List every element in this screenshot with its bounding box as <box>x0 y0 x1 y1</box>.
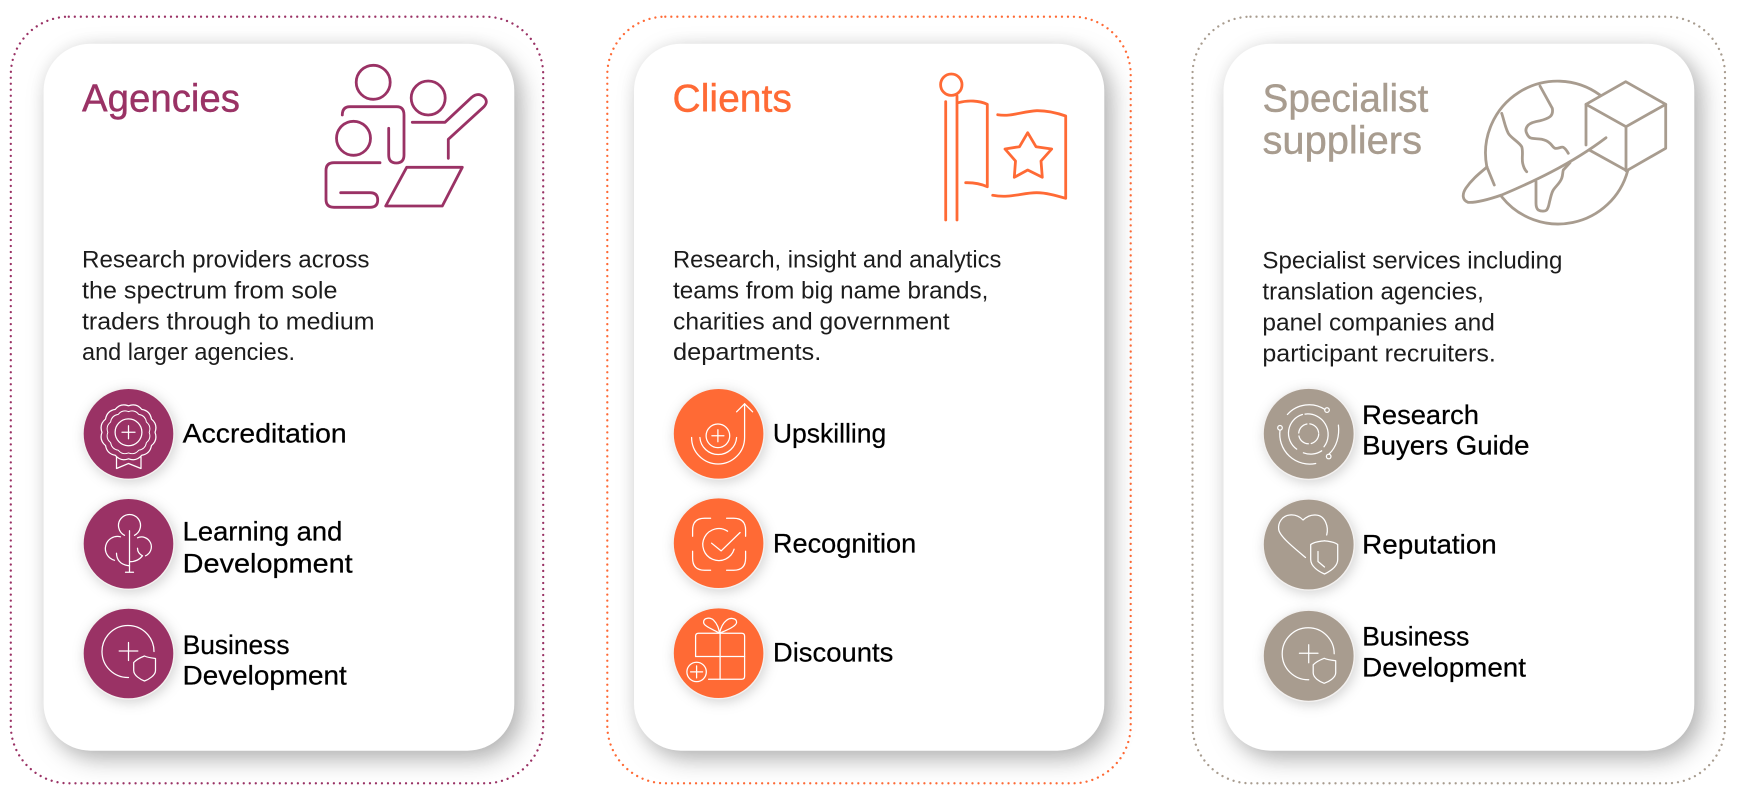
card: agencies <box>44 44 514 751</box>
icon: flag with star <box>941 74 1066 220</box>
icon: upskilling <box>673 388 764 479</box>
card: specialist suppliers <box>1224 44 1694 751</box>
heading: Clients: Clients <box>672 78 792 121</box>
label: Business Development: Development <box>1362 653 1527 683</box>
text: clients description: departments. <box>673 339 821 366</box>
text: specialist description: participant recruiters. <box>1262 341 1496 368</box>
text: specialist description: translation agencies, <box>1262 279 1484 306</box>
label: Discounts: Discounts <box>773 638 893 668</box>
label: Business Development: Development <box>183 661 347 691</box>
dotted outline: agencies <box>11 17 543 783</box>
label: Learning and Development: Development <box>183 549 353 579</box>
label: Reputation: Reputation <box>1362 530 1497 560</box>
text: clients description: charities and government <box>673 308 950 335</box>
text: specialist description: panel companies and <box>1262 309 1495 336</box>
text: clients description <box>673 247 1001 366</box>
panel: specialist suppliers <box>1192 17 1725 783</box>
panel: clients <box>607 17 1131 783</box>
text: clients description: Research, insight and analytics <box>673 247 1001 274</box>
icon: business development <box>1263 610 1354 701</box>
dotted outline: specialist suppliers <box>1192 17 1725 783</box>
label: Business Development <box>1362 622 1527 683</box>
card: clients <box>634 44 1104 751</box>
icon: learning tree <box>83 498 174 589</box>
icon: research buyers guide <box>1263 388 1354 479</box>
panel: agencies <box>11 17 543 783</box>
icon: accreditation badge <box>83 388 174 479</box>
label: Accreditation: Accreditation <box>183 419 347 449</box>
label: Business Development <box>183 630 347 691</box>
text: agencies description: and larger agencies. <box>82 339 295 366</box>
heading: Agencies: Agencies <box>82 78 240 121</box>
text: agencies description: the spectrum from sole <box>82 277 338 304</box>
label: Research Buyers Guide <box>1362 400 1530 461</box>
label: Recognition: Recognition <box>773 529 916 559</box>
icon: people with laptop <box>326 65 486 207</box>
text: agencies description: traders through to medium <box>82 308 374 335</box>
text: clients description: teams from big name brands, <box>673 277 988 304</box>
text: specialist description <box>1262 248 1562 368</box>
heading: Specialist suppliers: suppliers <box>1262 119 1422 162</box>
icon: gift discounts <box>673 608 764 699</box>
text: agencies description <box>82 247 374 366</box>
icon: recognition <box>673 498 764 589</box>
icon: reputation heart and shield <box>1263 499 1354 590</box>
label: Learning and Development <box>183 517 353 579</box>
label: Research Buyers Guide: Buyers Guide <box>1362 431 1530 461</box>
heading: Specialist suppliers: Specialist <box>1262 78 1428 121</box>
label: Upskilling: Upskilling <box>773 419 886 449</box>
text: agencies description: Research providers across <box>82 247 370 274</box>
dotted outline: clients <box>607 17 1131 783</box>
icon: globe with parcel <box>1463 81 1666 224</box>
text: specialist description: Specialist services including <box>1262 248 1562 275</box>
icon: business development <box>83 608 174 699</box>
label: Business Development: Business <box>1362 622 1469 652</box>
label: Business Development: Business <box>183 630 290 660</box>
label: Research Buyers Guide: Research <box>1362 400 1479 430</box>
label: Learning and Development: Learning and <box>183 517 342 547</box>
heading: Specialist suppliers <box>1262 78 1428 162</box>
